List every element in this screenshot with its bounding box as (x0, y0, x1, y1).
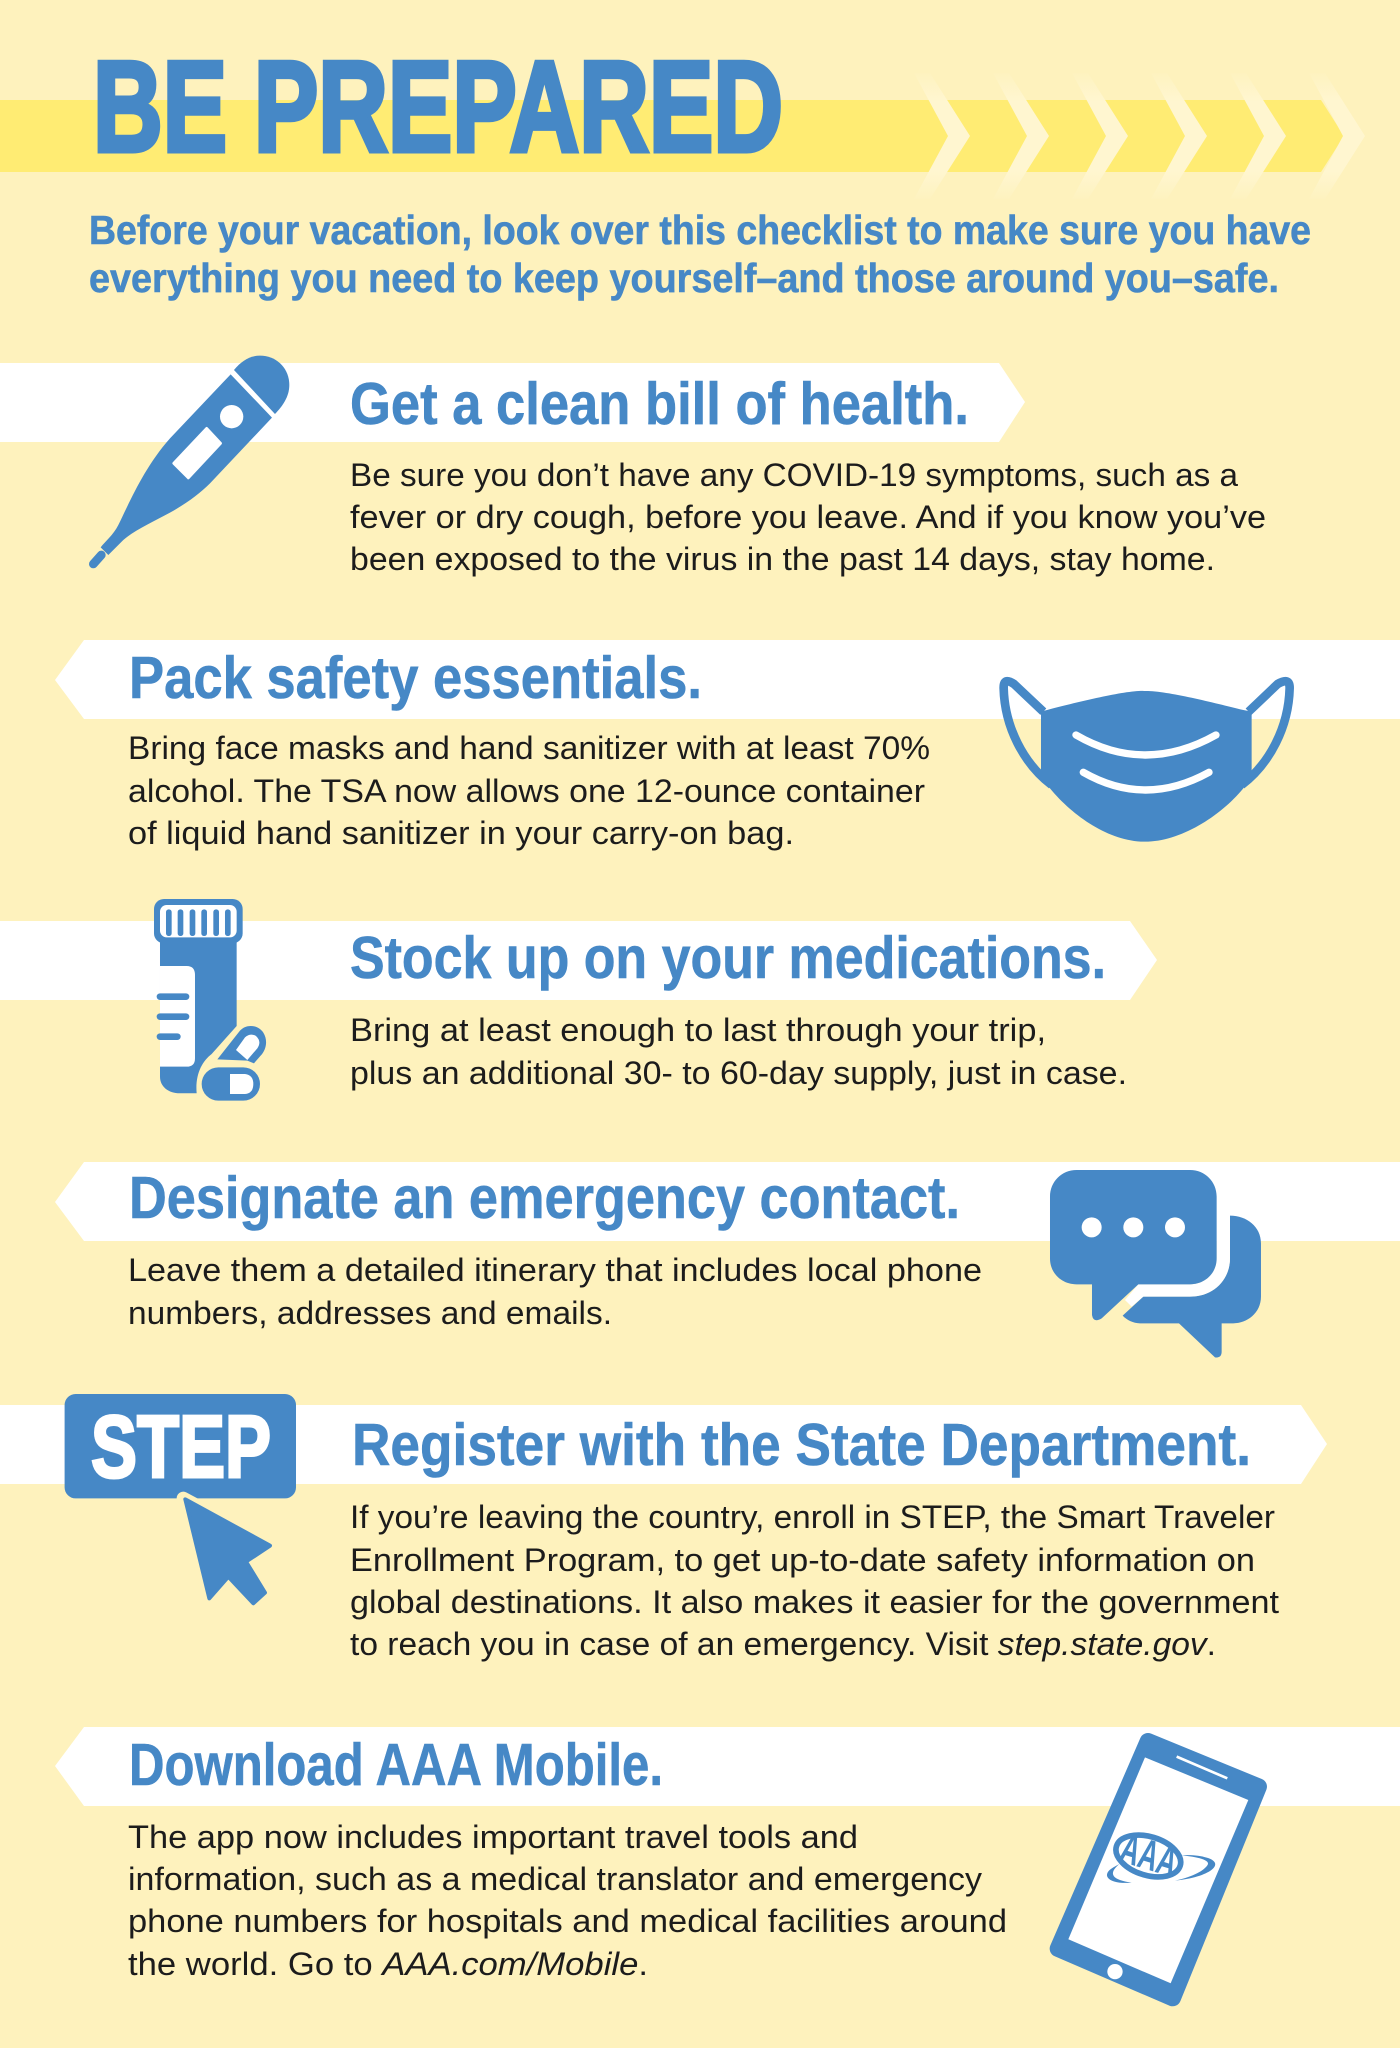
body text (350, 1012, 1127, 1091)
icon: face mask (1004, 681, 1290, 842)
heading: Pack safety essentials. (129, 645, 702, 711)
heading: Designate an emergency contact. (129, 1165, 960, 1231)
title band with chevrons (0, 73, 1365, 199)
panel: medications (0, 899, 1157, 1101)
panel: STEP registration (0, 1394, 1327, 1662)
body text: phone numbers for hospitals and medical facilities around (128, 1903, 1007, 1939)
banner: contact (55, 1162, 1400, 1241)
intro text: Before your vacation, look over this checklist to make sure you have (89, 207, 1311, 253)
icon: STEP button: STEP (91, 1397, 271, 1496)
body text (128, 1252, 982, 1331)
banner: mobile (55, 1727, 1400, 1806)
body text: If you’re leaving the country, enroll in STEP, the Smart Traveler (350, 1499, 1275, 1535)
body text: The app now includes important travel tools and (128, 1819, 858, 1855)
body text: the world. Go to AAA.com/Mobile . (128, 1946, 648, 1982)
panel: AAA Mobile (55, 1727, 1400, 1998)
panel: emergency contact (55, 1162, 1400, 1357)
icon: thermometer (93, 356, 289, 564)
body text: Bring face masks and hand sanitizer with at least 70% (128, 730, 930, 766)
banner: medications (0, 921, 1157, 1000)
icon: pill bottle (154, 899, 266, 1101)
icon: cursor arrow (183, 1498, 272, 1605)
body text: of liquid hand sanitizer in your carry-on bag. (128, 815, 794, 851)
body text (350, 457, 1266, 577)
body text: Leave them a detailed itinerary that includes local phone (128, 1252, 982, 1288)
intro text: everything you need to keep yourself–and those around you–safe. (89, 255, 1279, 301)
body text (350, 1499, 1279, 1662)
panel: safety essentials (55, 640, 1400, 851)
body text: fever or dry cough, before you leave. And if you know you’ve (350, 499, 1266, 535)
heading: Get a clean bill of health. (350, 371, 969, 437)
body text: alcohol. The TSA now allows one 12-ounce container (128, 773, 925, 809)
body text: Be sure you don’t have any COVID-19 symptoms, such as a (350, 457, 1238, 493)
intro text (89, 207, 1311, 301)
icon: chat bubbles (1050, 1170, 1261, 1357)
heading: Register with the State Department. (352, 1412, 1251, 1478)
banner: safety (55, 640, 1400, 719)
body text: Bring at least enough to last through your trip, (350, 1012, 1046, 1048)
body text: to reach you in case of an emergency. Visit step.state.gov . (350, 1626, 1216, 1662)
body text (128, 730, 930, 851)
body text: been exposed to the virus in the past 14 days, stay home. (350, 541, 1215, 577)
banner: health (0, 363, 1025, 442)
body text: numbers, addresses and emails. (128, 1295, 612, 1331)
body text: global destinations. It also makes it easier for the government (350, 1584, 1279, 1620)
icon: smartphone with AAA logo (1058, 1741, 1259, 1998)
body text: information, such as a medical translator and emergency (128, 1861, 982, 1897)
title: BE PREPARED (93, 35, 783, 179)
body text: plus an additional 30- to 60-day supply, just in case. (350, 1055, 1127, 1091)
heading: Download AAA Mobile. (129, 1732, 663, 1798)
body text: Enrollment Program, to get up-to-date safety information on (350, 1542, 1255, 1578)
heading: Stock up on your medications. (350, 925, 1106, 991)
banner: register (0, 1405, 1327, 1484)
icon: smartphone with AAA logo: AAA (1114, 1824, 1183, 1887)
panel: health (0, 356, 1266, 577)
body text (128, 1819, 1007, 1982)
